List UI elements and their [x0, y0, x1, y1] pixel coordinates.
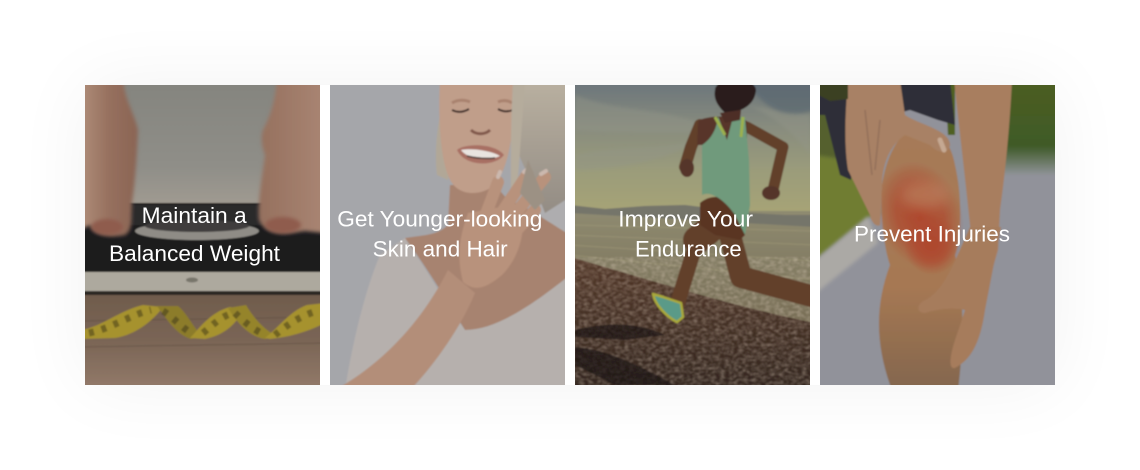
photo: smiling woman touching her neck [325, 80, 570, 390]
panel: maintain a balanced weight [85, 85, 320, 385]
heading: Endurance [635, 237, 742, 262]
heading: Prevent Injuries [854, 222, 1010, 247]
heading [109, 203, 280, 266]
heading [618, 207, 753, 262]
panel: improve your endurance [575, 85, 810, 385]
panel: prevent injuries [820, 85, 1055, 385]
heading [337, 207, 542, 262]
photo: feet on a scale with measuring tape [80, 80, 325, 390]
photo: runner holding an inflamed knee [815, 80, 1060, 390]
heading: Maintain a [142, 203, 247, 228]
heading: Balanced Weight [109, 241, 280, 266]
photo: runner on a pebble beach [570, 80, 815, 390]
heading: Improve Your [618, 207, 753, 232]
heading: Skin and Hair [373, 237, 508, 262]
panel: get younger-looking skin and hair [330, 85, 565, 385]
heading: Get Younger-looking [337, 207, 542, 232]
